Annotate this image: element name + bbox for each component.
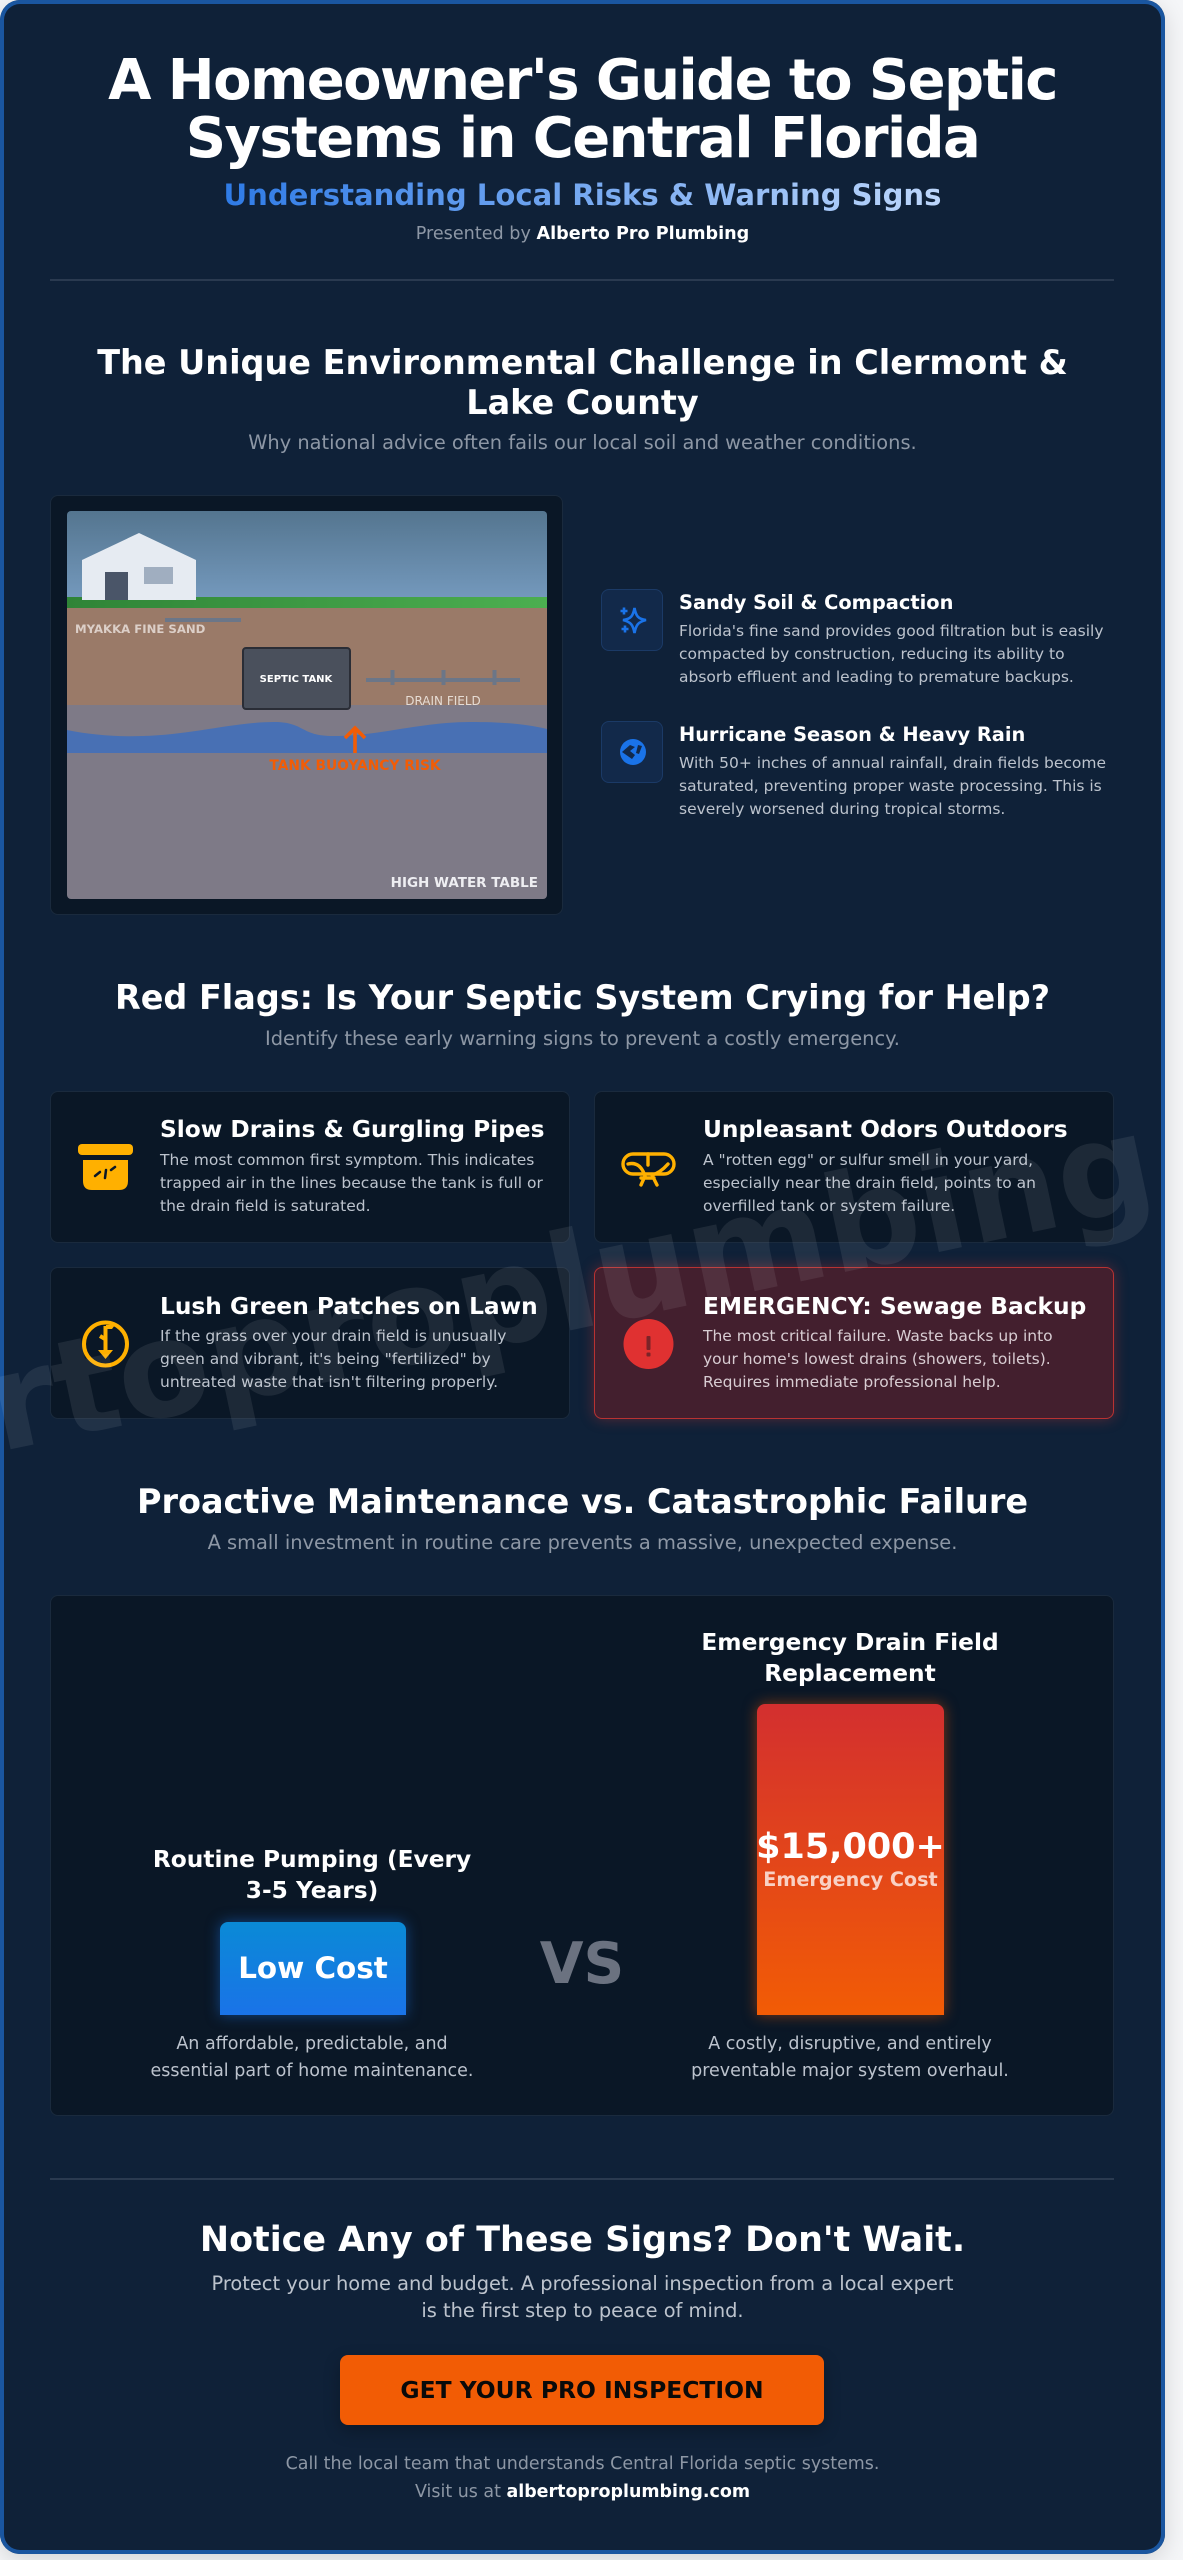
card: lush patches [50,1267,570,1419]
description: the drain field is saturated. [160,1197,371,1215]
water table layer [67,705,547,899]
subheading: environmental challenge: Why national advice often fails our local soil and weather conditions. [248,431,917,454]
label: emergency replacement [701,1629,999,1687]
description: routine pumping: essential part of home maintenance. [150,2061,474,2081]
description: routine pumping: An affordable, predictable, and [176,2034,448,2054]
description: A "rotten egg" or sulfur smell in your yard, [703,1151,1033,1169]
card: slow drains [50,1091,570,1243]
footer text [286,2454,879,2502]
icon: bucket [78,1144,133,1190]
septic tank [243,648,350,709]
title: EMERGENCY: Sewage Backup [703,1293,1086,1320]
sky [67,511,547,599]
heading: call to action: Notice Any of These Signs? Don't Wait. [200,2220,965,2260]
description: Requires immediate professional help. [703,1373,1001,1391]
icon: alert [624,1319,674,1369]
description [160,1151,543,1215]
sand layer [67,606,547,706]
description [160,1327,506,1391]
heading: maintenance vs failure: Proactive Maintenance vs. Catastrophic Failure [137,1482,1028,1521]
subheading: maintenance vs failure: A small investment in routine care prevents a massive, unexpected expense. [208,1531,957,1554]
subheading: red flags: Identify these early warning signs to prevent a costly emergency. [265,1027,900,1050]
description: emergency replacement [691,2034,1009,2081]
value: $15,000+ [756,1827,945,1867]
label: routine pumping: 3-5 Years) [246,1877,378,1904]
text: sandy soil description: compacted by construction, reducing its ability to [679,645,1065,663]
description: your home's lowest drains (showers, toilets). [703,1350,1051,1368]
drain field [366,670,520,708]
title: Systems in Central Florida [186,106,979,171]
icon: sandy soil sparkle [601,589,663,651]
description [702,1327,1053,1391]
heading: environmental challenge [97,343,1068,422]
text: hurricane description: With 50+ inches of annual rainfall, drain fields become [679,754,1106,772]
heading: red flags: Red Flags: Is Your Septic System Crying for Help? [115,978,1050,1017]
label: routine pumping: Routine Pumping (Every [153,1846,471,1873]
card: odors [594,1091,1114,1243]
bar: low cost [220,1922,406,2015]
description: trapped air in the lines because the tank is full or [160,1174,543,1192]
button: get your pro inspection [340,2355,824,2425]
title: Slow Drains & Gurgling Pipes [160,1116,545,1143]
card: emergency sewage backup [594,1267,1114,1419]
description: The most critical failure. Waste backs up into [703,1327,1053,1345]
label: emergency replacement: Emergency Drain Field [701,1629,999,1656]
description: The most common first symptom. This indicates [160,1151,534,1169]
heading: environmental challenge: Lake County [466,383,699,422]
icon: hurricane [601,721,663,783]
value caption: Emergency Cost [763,1868,938,1891]
inlet pipe [165,618,241,622]
description: green and vibrant, it's being "fertilized" by [160,1350,491,1368]
description: emergency replacement: A costly, disruptive, and entirely [708,2034,992,2054]
text: hurricane title: Hurricane Season & Heavy Rain [679,723,1025,746]
presenter line: Presented by Alberto Pro Plumbing [416,224,749,244]
heading: environmental challenge: The Unique Environmental Challenge in Clermont & [97,343,1068,382]
bar: low cost: Low Cost [238,1951,388,1985]
label: Myakka fine sand: MYAKKA FINE SAND [75,622,206,636]
description: untreated waste that isn't filtering properly. [160,1373,498,1391]
title: Unpleasant Odors Outdoors [703,1116,1068,1143]
title: A Homeowner's Guide to Septic [108,48,1057,113]
label: emergency replacement: Replacement [764,1660,936,1687]
drain field: DRAIN FIELD [405,694,481,708]
label: routine pumping [153,1846,471,1904]
bar: emergency cost [757,1704,944,2015]
text: sandy soil description: absorb effluent and leading to premature backups. [679,668,1074,686]
footer text: Call the local team that understands Central Florida septic systems. [286,2454,879,2474]
icon: pipe fumes [621,1152,676,1187]
icon: circle arrow [82,1320,129,1368]
groundwater wave [67,722,547,753]
label: tank buoyancy risk: TANK BUOYANCY RISK [269,758,442,774]
description: overfilled tank or system failure. [703,1197,955,1215]
description: especially near the drain field, points to an [703,1174,1036,1192]
text: sandy soil description [679,622,1104,686]
text: call to action: is the first step to peace of mind. [421,2299,744,2322]
panel: cost comparison [50,1595,1114,2116]
button: get your pro inspection: GET YOUR PRO INSPECTION [400,2376,764,2404]
description: emergency replacement: preventable major system overhaul. [691,2061,1009,2081]
title [108,48,1057,171]
house [82,533,196,600]
title: Lush Green Patches on Lawn [160,1293,538,1320]
text: sandy soil description: Florida's fine sand provides good filtration but is easily [679,622,1104,640]
septic tank: SEPTIC TANK [260,674,334,685]
label: high water table: HIGH WATER TABLE [391,875,538,891]
subtitle: Understanding Local Risks & Warning Signs [224,178,941,212]
vs label: VS [540,1931,624,1997]
text: hurricane description: severely worsened during tropical storms. [679,800,1005,818]
arrow: buoyancy [345,728,365,753]
grass [67,597,547,608]
text: sandy soil title: Sandy Soil & Compaction [679,591,953,614]
text: call to action [212,2272,953,2322]
panel: soil cross-section diagram [50,495,563,915]
text: hurricane description: saturated, preventing proper waste processing. This is [679,777,1102,795]
description: routine pumping [150,2034,474,2081]
description: If the grass over your drain field is unusually [160,1327,506,1345]
description [703,1151,1036,1215]
footer text: Visit us at albertoproplumbing.com [415,2482,750,2502]
diagram: septic system in soil [67,511,547,899]
text: hurricane description [679,754,1106,818]
text: call to action: Protect your home and budget. A professional inspection from a local expert [212,2272,953,2295]
